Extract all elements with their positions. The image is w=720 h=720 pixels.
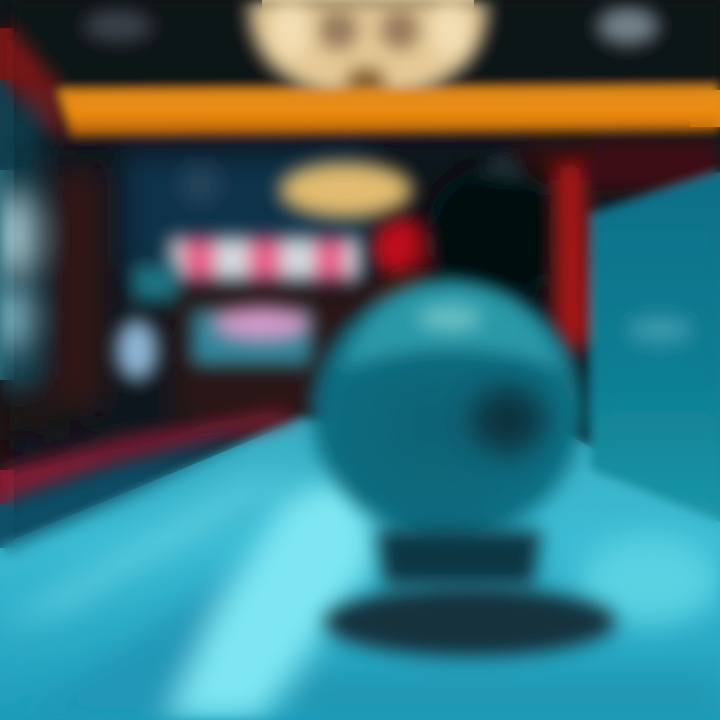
floor xyxy=(0,410,720,720)
sphere lens xyxy=(470,386,546,454)
sphere top highlight xyxy=(340,282,565,370)
ceiling lights xyxy=(84,8,658,44)
floor light rays xyxy=(0,465,720,720)
dark teal floor shadow xyxy=(0,435,250,552)
left wall columns xyxy=(0,100,104,440)
glowing oval sign xyxy=(280,163,412,217)
lower shop counter xyxy=(117,255,430,380)
pale round face medallion xyxy=(250,0,486,100)
red accent blob xyxy=(373,218,437,278)
dark red upper right xyxy=(590,145,720,185)
ceiling area xyxy=(0,0,720,150)
red floor edge xyxy=(0,410,300,504)
orange ceiling bar xyxy=(58,86,720,136)
dark base ellipse xyxy=(324,587,616,657)
teal right panel xyxy=(590,172,720,522)
striped pink and white awning xyxy=(170,238,360,280)
red ribbon xyxy=(555,160,590,358)
dark shape above sphere xyxy=(425,165,565,305)
teal sphere xyxy=(312,282,584,538)
sphere stem xyxy=(376,530,542,585)
small wall lights xyxy=(178,160,522,205)
middle dark wall xyxy=(14,140,720,440)
